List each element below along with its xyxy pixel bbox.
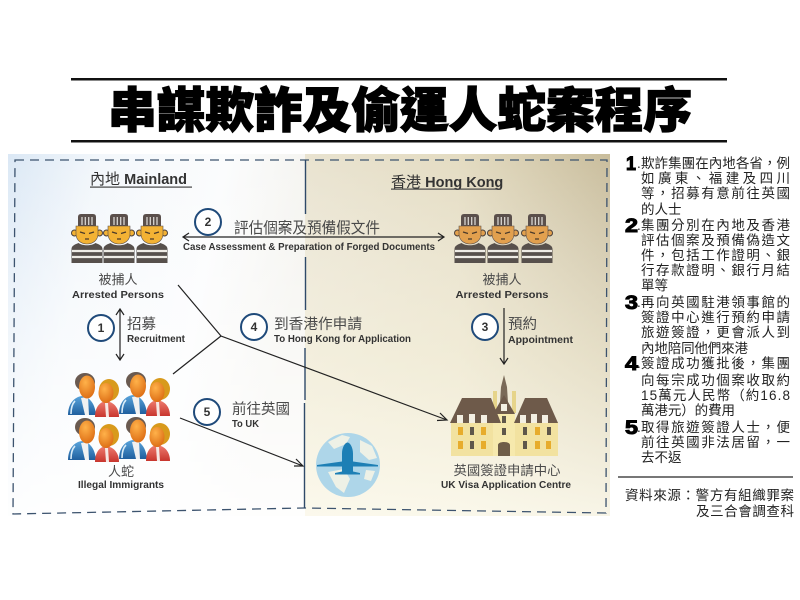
label: visa application centre: 英國簽證申請中心 xyxy=(454,463,560,478)
icon: arrested persons hong kong xyxy=(454,214,552,263)
item 4: 簽證成功獲批後，集團 xyxy=(641,355,790,371)
step 5: to uk xyxy=(180,399,303,466)
item 1: 如廣東、福建及四川 xyxy=(641,170,790,186)
icon: visa application centre building xyxy=(450,375,558,456)
step 3: appointment: Appointment xyxy=(508,335,574,346)
step 3: appointment xyxy=(472,308,574,364)
item 4: . xyxy=(637,356,641,371)
step 1: recruitment xyxy=(88,309,186,360)
label: arrested persons hong kong xyxy=(456,272,549,301)
item 3: 旅遊簽證，更會派人到 xyxy=(641,324,790,340)
panel: process diagram xyxy=(8,154,610,516)
item 2 xyxy=(625,216,790,293)
step 5: to uk: 5 xyxy=(204,405,211,419)
step 5: to uk: To UK xyxy=(232,419,260,430)
step 2: case assessment: Case Assessment & Preparation of Forged Documents xyxy=(183,242,435,253)
item 3: 再向英國駐港領事館的 xyxy=(641,295,790,310)
item 2: 2 xyxy=(625,216,638,237)
item 4: 向每宗成功個案收取約 xyxy=(641,373,790,388)
label: arrested persons mainland: Arrested Persons xyxy=(72,290,164,301)
source divider xyxy=(618,476,793,478)
step 2: case assessment: 2 xyxy=(205,215,212,229)
panel: mainland background xyxy=(8,154,305,516)
step 4: to hong kong for application: 到香港作申請 xyxy=(274,316,362,333)
label: arrested persons mainland xyxy=(72,272,164,301)
item 1 xyxy=(626,154,790,217)
step 2: case assessment: 評估個案及預備假文件 xyxy=(234,219,380,237)
item 4: 15萬元人民幣（約16.8 xyxy=(641,388,790,403)
step 3: appointment: 3 xyxy=(482,320,489,334)
icon: arrested persons mainland xyxy=(72,214,168,263)
step 4: to hong kong for application: To Hong Kong for Application xyxy=(274,334,411,345)
item 1: 的人士 xyxy=(641,202,682,217)
item 5 xyxy=(625,418,790,465)
item 5: . xyxy=(637,420,641,435)
source note xyxy=(625,488,794,519)
title: 串謀欺詐及偷運人蛇案程序 xyxy=(108,84,692,138)
text block: numbered explanation xyxy=(625,154,790,465)
item 5: 取得旅遊簽證人士，便 xyxy=(641,419,790,435)
item 2: 行存款證明、銀行月結 xyxy=(641,262,790,278)
label: illegal immigrants: Illegal Immigrants xyxy=(78,480,164,491)
item 3: 3 xyxy=(625,293,638,314)
dashed region border xyxy=(13,160,607,514)
item 2: 集團分別在內地及香港 xyxy=(641,218,790,233)
step 3: appointment: 預約 xyxy=(508,316,537,333)
item 4: 4 xyxy=(625,354,639,375)
item 3: . xyxy=(637,295,641,310)
label: illegal immigrants: 人蛇 xyxy=(108,464,134,479)
label: arrested persons hong kong: 被捕人 xyxy=(482,272,522,287)
item 2: 單等 xyxy=(641,277,668,293)
item 2: 件，包括工作證明、銀 xyxy=(641,247,790,263)
icon: globe and plane xyxy=(316,433,380,497)
label: arrested persons hong kong: Arrested Persons xyxy=(456,290,549,301)
panel: hong kong background xyxy=(305,154,610,516)
icon: illegal immigrants xyxy=(68,372,170,462)
bottom title rule xyxy=(71,140,727,142)
label: illegal immigrants xyxy=(78,464,164,491)
item 1: . xyxy=(637,156,641,171)
step 4: to hong kong for application: 4 xyxy=(251,320,258,334)
item 5: 5 xyxy=(625,418,639,439)
item 1: 欺詐集團在內地各省，例 xyxy=(641,156,790,171)
item 3: 內地陪同他們來港 xyxy=(641,341,748,356)
step 1: recruitment: Recruitment xyxy=(127,334,186,345)
step 2: case assessment xyxy=(183,209,444,253)
step 1: recruitment: 招募 xyxy=(127,316,156,333)
step 5: to uk: 前往英國 xyxy=(232,401,290,418)
heading: Hong Kong: 香港 Hong Kong xyxy=(391,174,503,191)
item 4: 萬港元）的費用 xyxy=(641,403,735,418)
step 1: recruitment: 1 xyxy=(98,321,105,335)
item 3: 簽證中心進行預約申請 xyxy=(641,309,790,325)
source note: 資料來源：警方有組織罪案 xyxy=(625,488,794,503)
item 1: 等，招募有意前往英國 xyxy=(641,185,790,201)
step 4: to hong kong for application xyxy=(173,285,447,420)
dashed divider xyxy=(304,160,306,508)
top rule xyxy=(71,78,727,80)
item 2: . xyxy=(637,218,641,233)
label: arrested persons mainland: 被捕人 xyxy=(98,272,138,287)
item 5: 去不返 xyxy=(641,450,682,465)
label: visa application centre: UK Visa Application Centre xyxy=(441,480,571,491)
source note: 及三合會調查科 xyxy=(696,504,794,519)
item 1: 1 xyxy=(626,154,636,175)
label: visa application centre xyxy=(441,463,571,491)
item 4 xyxy=(625,354,790,418)
item 5: 前往英國非法居留，一 xyxy=(641,434,790,450)
item 3 xyxy=(625,293,790,356)
item 2: 評估個案及預備偽造文 xyxy=(641,233,790,248)
heading: Mainland: 內地 Mainland xyxy=(90,171,187,188)
